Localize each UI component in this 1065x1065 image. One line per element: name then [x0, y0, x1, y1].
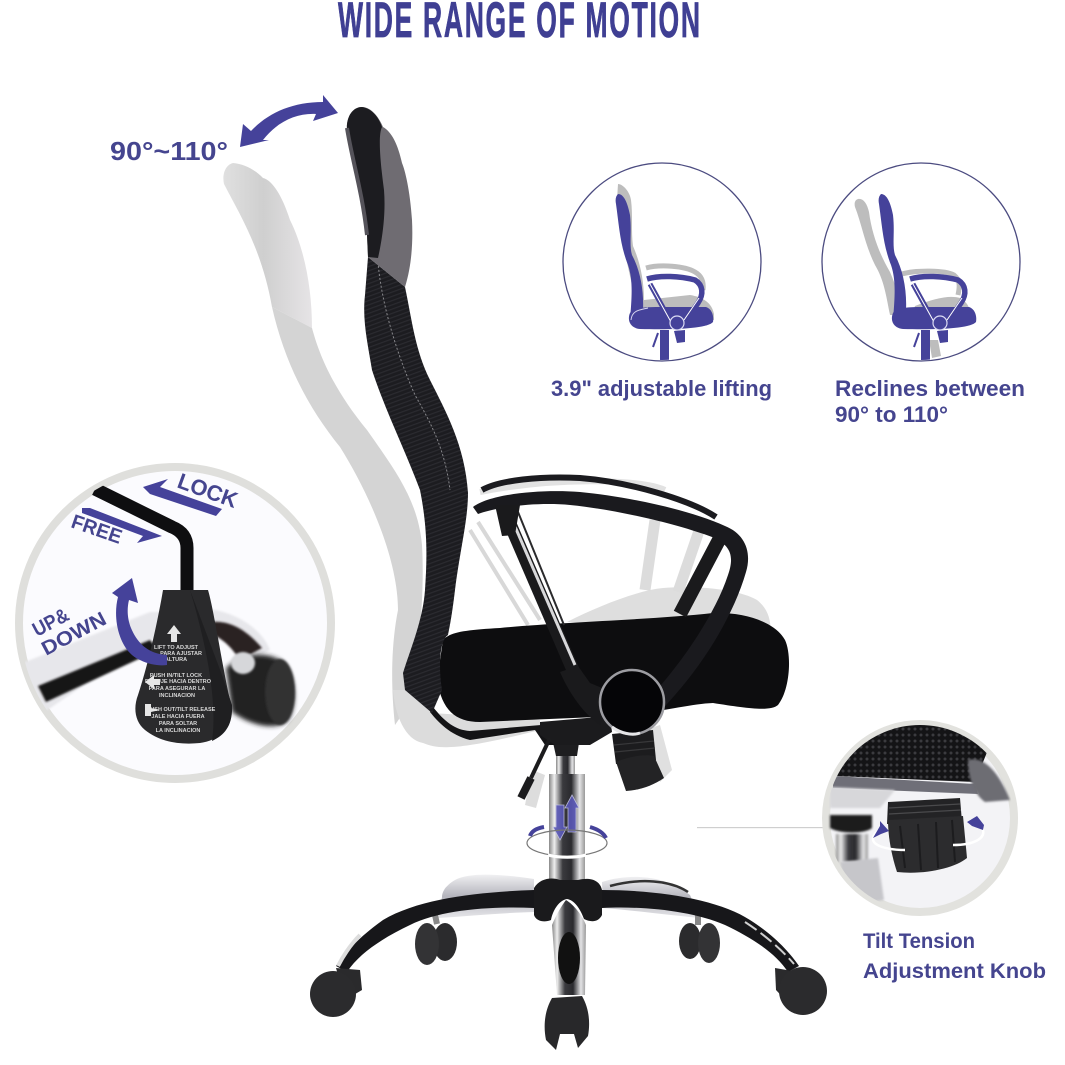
- caption: tilt tension knob: [863, 930, 1046, 983]
- chrome post: [836, 834, 868, 862]
- blue arm: [909, 274, 968, 307]
- gas lift upper rod: [556, 752, 575, 776]
- grey raised chair: [617, 184, 714, 320]
- chair base: cylinder, hub and legs: [310, 736, 827, 1050]
- lever instructions: [145, 645, 216, 734]
- lever instructions: LIFT TO ADJUST: [154, 645, 199, 651]
- caption: recline: Reclines between: [835, 376, 1025, 401]
- panel: tilt knob detail circle: [826, 720, 1014, 912]
- caption: tilt tension knob: Adjustment Knob: [863, 960, 1046, 983]
- lever instructions: JALE HACIA FUERA: [151, 714, 205, 720]
- free label: FREE: [68, 511, 125, 549]
- blue arm: [646, 274, 705, 307]
- caster in background: [226, 655, 294, 726]
- panel background: [826, 724, 1014, 912]
- up and down label: UP&: [29, 604, 73, 641]
- blue back: [616, 194, 643, 320]
- blurred side wheel: [968, 759, 1010, 802]
- ghost mesh back: [272, 307, 423, 725]
- lever instructions: EMPUJE HACIA DENTRO: [145, 679, 212, 685]
- gas lift cylinder: [549, 774, 585, 880]
- tilt ring: [600, 670, 664, 734]
- blue seat: [629, 307, 713, 329]
- lever instructions: PUSH OUT/TILT RELEASE: [147, 707, 216, 713]
- connector line to tilt knob: [697, 827, 825, 828]
- lever rod: [95, 489, 187, 592]
- height lever: [531, 738, 550, 778]
- recline angle label: 90°~110°: [110, 136, 228, 166]
- instruction arrows on paddle: [145, 625, 181, 716]
- seat cushion: [437, 613, 789, 722]
- lock label: LOCK: [174, 468, 241, 513]
- front left caster: [310, 968, 362, 1017]
- rear left caster: [415, 923, 457, 965]
- blue back: [879, 194, 906, 320]
- armrest loop: [473, 491, 748, 712]
- ghost seat and arm: [567, 587, 771, 640]
- lever instructions: PARA AJUSTAR: [160, 651, 202, 657]
- circle outline: [563, 163, 761, 361]
- lever instructions: LA INCLINACION: [156, 728, 200, 734]
- metal plate: [833, 776, 978, 794]
- arm base bracket: [560, 666, 612, 725]
- front right caster: [775, 967, 827, 1015]
- panel background: [19, 467, 331, 779]
- lever instructions: ALTURA: [165, 657, 187, 663]
- up and down label: DOWN: [38, 608, 110, 660]
- headrest cushion: [347, 107, 412, 287]
- main chair: [347, 107, 789, 798]
- seat mesh underside: [837, 725, 987, 782]
- caption: lifting: 3.9" adjustable lifting: [551, 376, 772, 401]
- blurred chrome tube: [26, 610, 270, 710]
- rotation arrows: [873, 820, 983, 850]
- grey reclined back: [854, 198, 895, 315]
- icon: recline chair: [822, 163, 1020, 362]
- tilt knob stem: [612, 730, 656, 764]
- lever instructions: PUSH IN/TILT LOCK: [150, 673, 202, 679]
- left front leg: [336, 890, 534, 972]
- panel: lever detail circle: [10, 467, 331, 779]
- lock arrow: [143, 479, 222, 516]
- knob body: [888, 816, 967, 873]
- chair back legs and casters: [415, 875, 720, 965]
- caption: tilt tension knob: Tilt Tension: [863, 930, 975, 953]
- chrome arm post: [507, 517, 573, 670]
- front center caster: [545, 996, 589, 1050]
- height and swivel ring: [527, 827, 607, 857]
- free arrow: [82, 508, 162, 543]
- threaded neck: [887, 798, 962, 824]
- lever instructions: INCLINACION: [159, 693, 195, 699]
- right front leg: [602, 890, 799, 972]
- lever paddle: [135, 590, 231, 744]
- back rest mesh: [364, 257, 468, 713]
- front arm support: [680, 538, 720, 614]
- icon: height adjustable chair: [563, 163, 761, 362]
- curved up and down arrow: [112, 578, 167, 665]
- seat pan and mechanism: [430, 707, 600, 745]
- caption: recline: [835, 376, 1025, 427]
- circle outline: [822, 163, 1020, 361]
- ghost headrest: [223, 163, 312, 328]
- ghost seat underside: [393, 690, 540, 747]
- height arrows on cylinder: [553, 795, 579, 840]
- rear right caster: [679, 923, 720, 963]
- lever instructions: PARA SOLTAR: [159, 721, 197, 727]
- lever instructions: PARA ASEGURAR LA: [149, 686, 205, 692]
- headrest dark edge: [347, 107, 385, 258]
- blue seat: [892, 307, 976, 329]
- far armrest: [482, 478, 716, 517]
- cylinder collar: [830, 815, 872, 832]
- rear left base leg: [438, 875, 534, 918]
- blue stem and knob: [921, 330, 930, 362]
- hub: [534, 879, 602, 921]
- ghost chair: reclined position: [223, 163, 771, 808]
- arrow: recline range: [240, 95, 338, 147]
- caption: recline: 90° to 110°: [835, 402, 948, 427]
- center front leg: [552, 900, 586, 995]
- rear right base leg: [602, 877, 700, 918]
- blue stem and knob: [660, 330, 669, 362]
